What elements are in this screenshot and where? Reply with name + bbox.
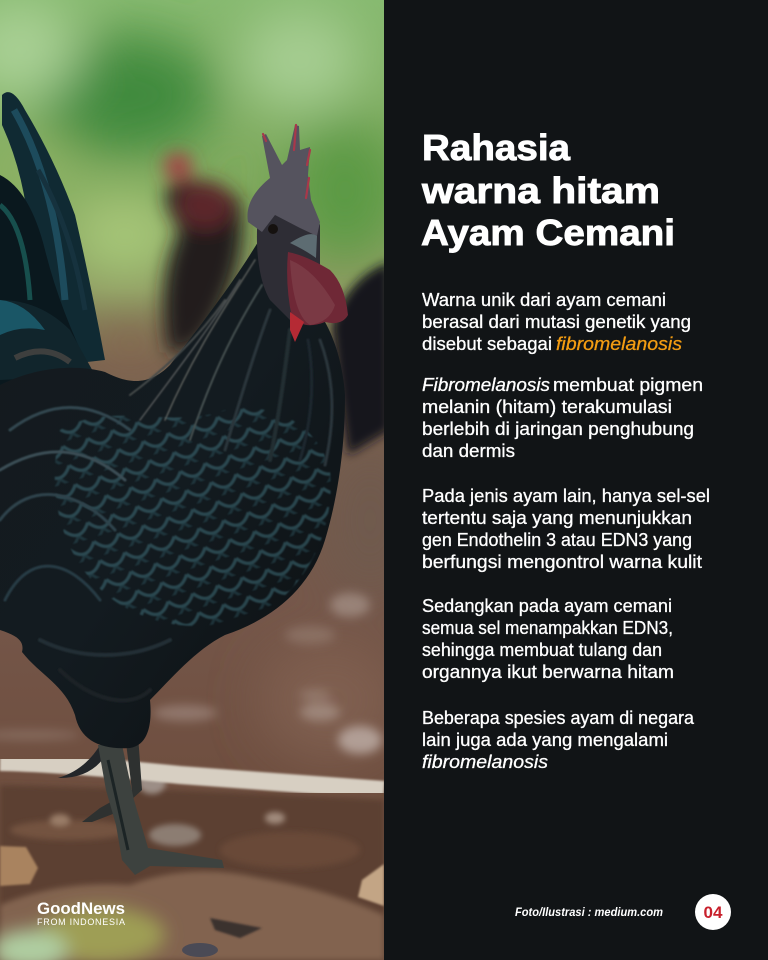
- text block: paragraph 3: gen Endothelin 3 atau EDN3 yang: [422, 530, 692, 550]
- text block: paragraph 2: berlebih di jaringan penghubung: [422, 419, 694, 439]
- title: warna hitam: [421, 170, 660, 211]
- beak: [290, 234, 317, 258]
- text block: paragraph 3: berfungsi mengontrol warna kulit: [422, 552, 702, 572]
- text block: paragraph 1: berasal dari mutasi genetik yang: [422, 312, 691, 332]
- rocks and mounds: [0, 846, 384, 960]
- text block: paragraph 5: Beberapa spesies ayam di negara: [422, 708, 695, 728]
- rooster: [0, 92, 348, 875]
- green blur at bottom left: [0, 907, 165, 960]
- background hen: [164, 153, 242, 353]
- text block: paragraph 2: membuat pigmen: [553, 375, 703, 395]
- page number badge: [695, 894, 731, 930]
- text block: paragraph 1: [422, 290, 691, 354]
- text block: paragraph 4: semua sel menampakkan EDN3,: [422, 618, 673, 638]
- text block: paragraph 5: [422, 708, 695, 772]
- page number badge: 04: [704, 903, 723, 922]
- text block: paragraph 2: [422, 375, 703, 461]
- neck hackle feathers: [130, 260, 332, 465]
- rooster legs: [58, 735, 224, 875]
- photo credit: Foto/Ilustrasi : medium.com: [515, 905, 663, 919]
- photo background: [0, 0, 420, 960]
- text block: paragraph 2: dan dermis: [422, 441, 515, 461]
- wing feathers: [0, 408, 170, 700]
- title: Rahasia: [422, 127, 571, 168]
- ground specks: [0, 593, 382, 754]
- text block: paragraph 5: lain juga ada yang mengalami: [422, 730, 668, 750]
- title: Ayam Cemani: [421, 212, 675, 253]
- text block: paragraph 4: [422, 596, 674, 682]
- text block: paragraph 3: Pada jenis ayam lain, hanya sel-sel: [422, 486, 710, 506]
- text block: paragraph 3: tertentu saja yang menunjukkan: [422, 508, 692, 528]
- wattles: [287, 252, 348, 325]
- breast scales: [55, 408, 331, 626]
- tail feathers: [0, 92, 105, 390]
- rooster body: [0, 242, 345, 748]
- text block: paragraph 4: organnya ikut berwarna hitam: [422, 662, 674, 682]
- text block: paragraph 2: Fibromelanosis: [422, 375, 550, 395]
- head: [247, 125, 348, 342]
- panel: dark text column: [384, 0, 768, 960]
- text block: paragraph 1: disebut sebagai: [422, 334, 552, 354]
- text block: paragraph 4: Sedangkan pada ayam cemani: [422, 596, 672, 616]
- dark blurred bird at right: [332, 262, 390, 455]
- text block: paragraph 2: melanin (hitam) terakumulasi: [422, 397, 672, 417]
- text block: paragraph 1: fibromelanosis: [556, 334, 682, 354]
- comb: [247, 125, 320, 236]
- white pipe: [0, 762, 384, 790]
- title: [421, 127, 675, 253]
- logo: GoodNews from Indonesia: GoodNews: [37, 899, 125, 918]
- logo: GoodNews from Indonesia: [38, 902, 125, 925]
- text block: paragraph 3: [422, 486, 710, 572]
- text block: paragraph 5: fibromelanosis: [422, 752, 548, 772]
- panel: photo of Ayam Cemani: [0, 0, 420, 960]
- ground lower: [0, 784, 384, 913]
- text block: paragraph 1: Warna unik dari ayam cemani: [422, 290, 666, 310]
- logo: GoodNews from Indonesia: FROM INDONESIA: [37, 917, 125, 927]
- text block: paragraph 4: sehingga membuat tulang dan: [422, 640, 662, 660]
